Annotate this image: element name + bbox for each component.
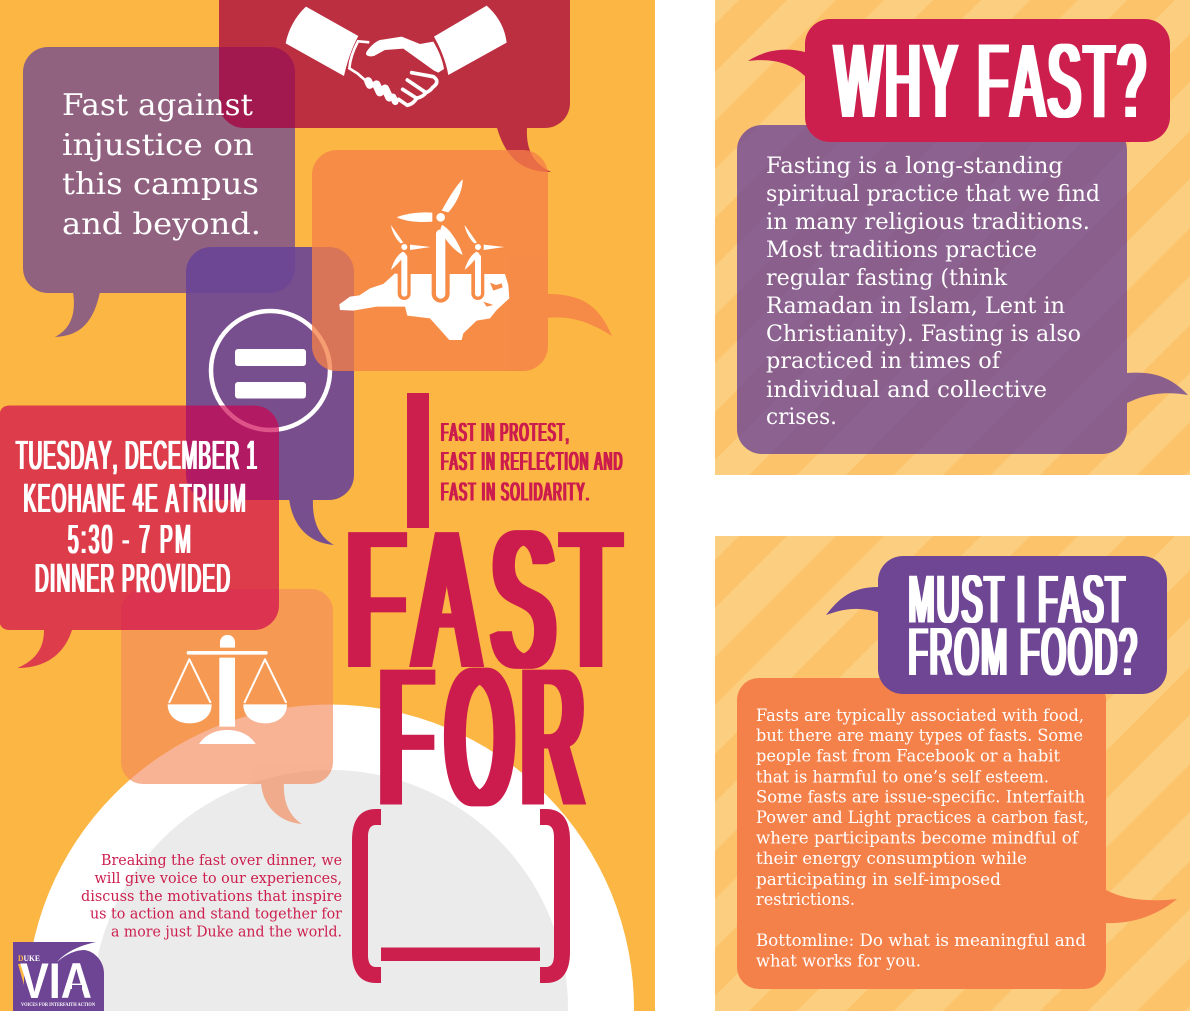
quote text: fast against injustice: Fast against — [62, 88, 253, 123]
body text: food: that is harmful to one’s self esteem. — [756, 768, 1049, 788]
body text: why fast: in many religious traditions. — [766, 209, 1090, 235]
logo: Duke VIA: DUKE — [18, 954, 40, 963]
icon: equal sign in circle — [211, 311, 330, 430]
heading: must I fast from food — [908, 562, 1137, 690]
speech bubble: food heading — [826, 556, 1167, 694]
logo: Duke VIA: VIA — [20, 953, 92, 1009]
big title: I fast for: FAST — [348, 490, 619, 709]
body text: why fast: spiritual practice that we find — [766, 181, 1100, 207]
body text: why fast: practiced in times of — [766, 348, 1002, 374]
body text: why fast: Christianity). Fasting is also — [766, 321, 1081, 347]
body text: food — [756, 706, 1089, 972]
quote text: fast against injustice: injustice on — [62, 128, 254, 163]
description: breaking the fast: discuss the motivations that inspire — [81, 889, 342, 905]
icon: scales of justice — [168, 635, 287, 744]
logo: Duke VIA: VOICES FOR INTERFAITH ACTION — [21, 1003, 95, 1008]
event details text: KEOHANE 4E ATRIUM — [24, 475, 246, 521]
big title: I fast for: FOR — [380, 627, 583, 846]
quote text: fast against injustice — [62, 88, 261, 242]
body text: why fast: crises. — [766, 404, 837, 430]
body text: why fast: Fasting is a long-standing — [766, 153, 1063, 179]
heading: must I fast from food: FROM FOOD? — [908, 615, 1137, 690]
body text: food: their energy consumption while — [756, 849, 1027, 869]
icon: wind turbines over North Carolina — [339, 179, 509, 340]
body text: food: participating in self-imposed — [756, 870, 1001, 890]
icon: handshake — [286, 6, 507, 106]
bracket blank — [352, 809, 570, 983]
description: breaking the fast: us to action and stand together for — [90, 906, 342, 922]
body text: food: Power and Light practices a carbon fast, — [756, 808, 1089, 828]
speech bubble: handshake — [219, 0, 570, 172]
heading: must I fast from food: MUST I FAST — [908, 562, 1125, 638]
body text: why fast: individual and collective — [766, 377, 1047, 403]
body text: why fast — [766, 153, 1100, 430]
panel: poster — [0, 0, 655, 1011]
description: breaking the fast — [81, 853, 342, 940]
body text: food: Bottomline: Do what is meaningful and — [756, 931, 1086, 951]
slogan text: FAST IN PROTEST, — [441, 419, 569, 447]
speech bubble: event details — [0, 405, 279, 668]
body text: why fast: Most traditions practice — [766, 237, 1037, 263]
quote text: fast against injustice: and beyond. — [62, 207, 261, 242]
panel: must I fast from food — [715, 536, 1190, 1011]
slogan text — [441, 419, 622, 507]
body text: food: people fast from Facebook or a habit — [756, 747, 1060, 767]
quote text: fast against injustice: this campus — [62, 167, 259, 202]
body text: why fast: Ramadan in Islam, Lent in — [766, 293, 1065, 319]
body text: food: restrictions. — [756, 890, 855, 910]
speech bubble: equality — [186, 247, 354, 545]
speech bubble: food body — [737, 678, 1177, 989]
description: breaking the fast: Breaking the fast over dinner, we — [101, 853, 342, 869]
big title: I fast for — [348, 393, 619, 846]
event details text: TUESDAY, DECEMBER 1 — [16, 432, 257, 478]
body text: food: Some fasts are issue-specific. Interfaith — [756, 788, 1085, 808]
body text: why fast: regular fasting (think — [766, 265, 1007, 291]
white plate circle — [26, 705, 634, 1011]
event details text: DINNER PROVIDED — [35, 555, 230, 601]
body text: food: where participants become mindful of — [756, 829, 1080, 849]
panel: why fast — [715, 0, 1190, 475]
striped background — [715, 536, 1190, 1011]
speech bubble: wind energy — [312, 150, 612, 371]
event details text — [16, 432, 257, 601]
striped background — [715, 0, 1190, 475]
body text: food: Fasts are typically associated with food, — [756, 706, 1084, 726]
grey inner plate circle — [92, 770, 568, 1011]
speech bubble: why fast body — [737, 125, 1188, 454]
description: breaking the fast: a more just Duke and the world. — [111, 924, 342, 940]
slogan text: FAST IN REFLECTION AND — [441, 448, 622, 476]
poster background — [0, 0, 655, 1011]
description: breaking the fast: will give voice to our experiences, — [94, 871, 342, 887]
speech bubble: why fast heading — [748, 19, 1170, 142]
body text: food: what works for you. — [756, 952, 921, 972]
heading: why fast: WHY FAST? — [835, 24, 1145, 140]
slogan text: FAST IN SOLIDARITY. — [441, 479, 589, 507]
speech bubble: fast against injustice — [23, 47, 295, 337]
event details text: 5:30 - 7 PM — [68, 516, 191, 562]
body text: food: but there are many types of fasts. Some — [756, 726, 1083, 746]
speech bubble: scales of justice — [121, 589, 333, 824]
